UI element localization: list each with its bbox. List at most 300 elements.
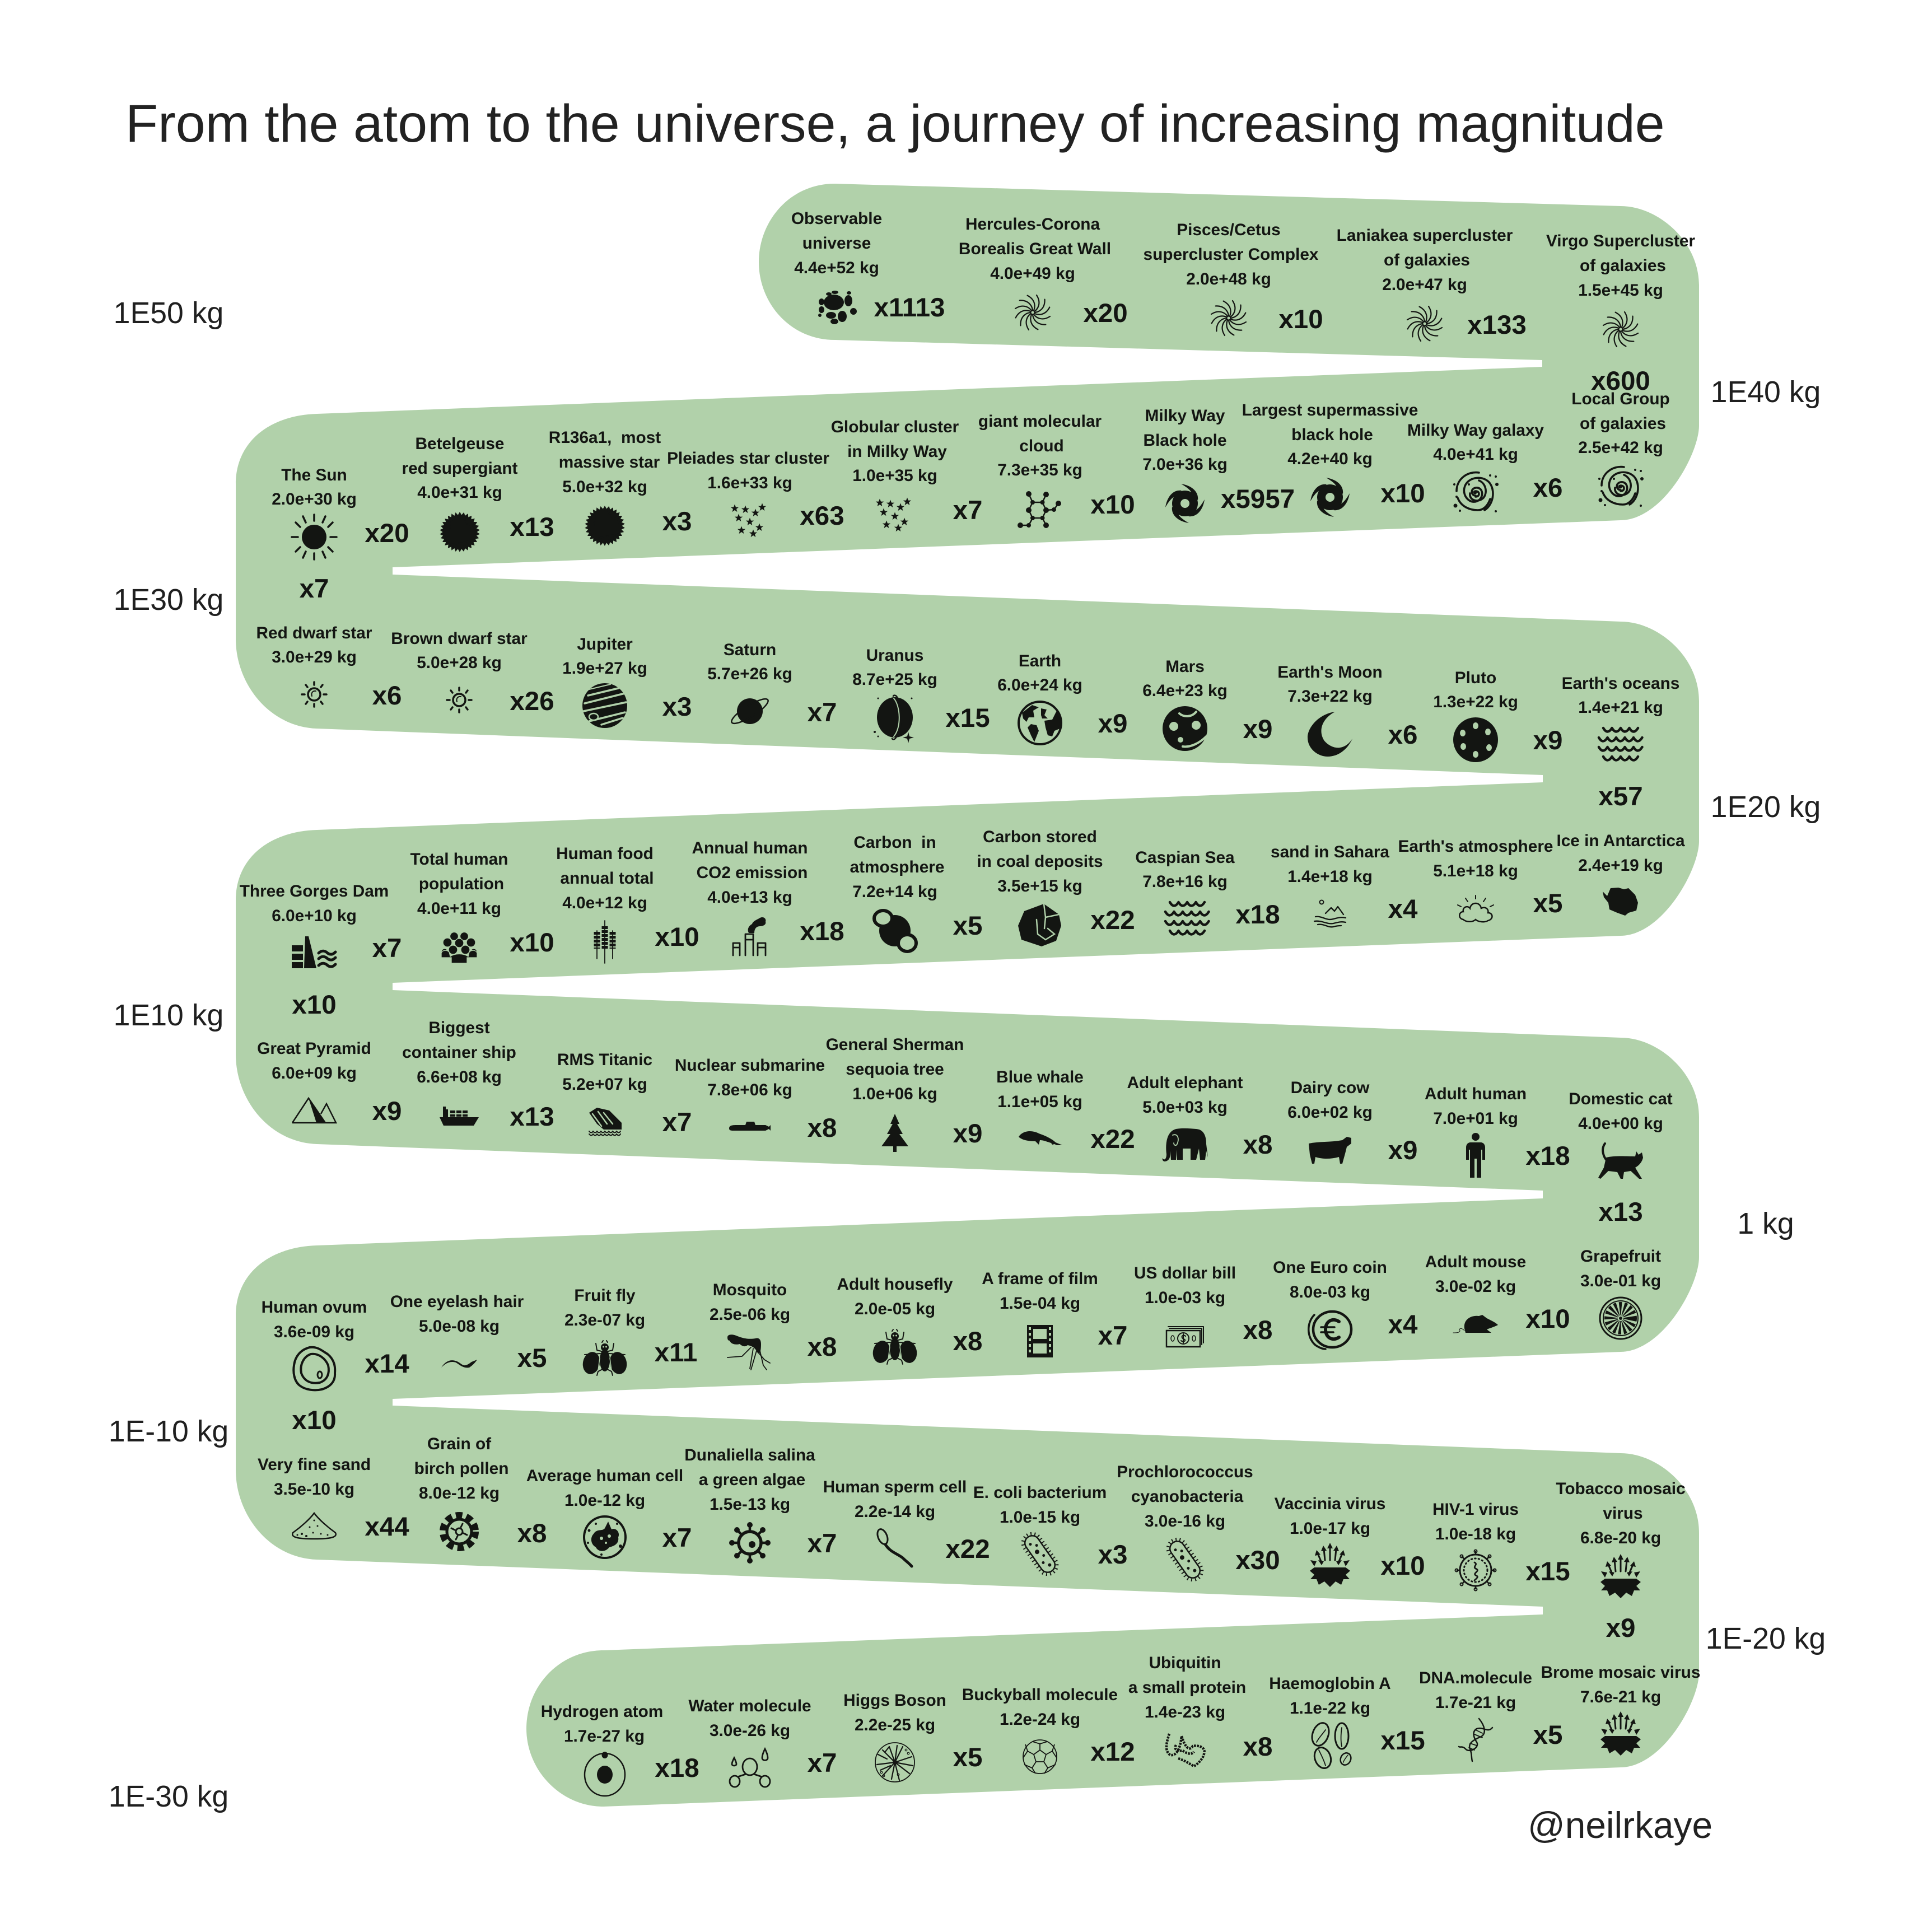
item: Hydrogen atom: 1.7e-27 kg [564,1727,645,1746]
item: Adult housefly: Adult housefly [837,1275,953,1294]
item: Adult human: 7.0e+01 kg [1433,1109,1518,1128]
item: Betelgeuse red supergiant [402,435,518,555]
item: HIV-1 virus: HIV-1 virus [1432,1500,1519,1519]
multiplier: x57 [1598,782,1643,811]
axis label 1E20: 1E20 kg [1711,790,1821,824]
item: Pleiades star cluster: 1.6e+33 kg [707,474,792,492]
item: Observable universe: 4.4e+52 kg [794,259,879,277]
item: Largest supermassive black hole: black hole [1291,426,1373,444]
item: US dollar bill [1134,1264,1236,1347]
item: DNA.molecule: DNA.molecule [1419,1669,1532,1687]
axis label 1E30: 1E30 kg [114,583,223,617]
item: Pluto: Pluto [1455,669,1496,687]
item: Human ovum [262,1298,367,1390]
item: Water molecule: 3.0e-26 kg [710,1721,790,1740]
item: Adult human: Adult human [1425,1085,1527,1103]
item: Blue whale: 1.1e+05 kg [997,1093,1082,1111]
item: Human sperm cell [823,1478,967,1566]
multiplier: x3 [1098,1540,1127,1570]
item: General Sherman sequoia tree [826,1035,964,1152]
item: Very fine sand: 3.5e-10 kg [274,1480,354,1499]
item: Local Group of galaxies: Local Group [1571,390,1670,408]
axis label 1E-30: 1E-30 kg [109,1780,228,1813]
multiplier: x8 [808,1332,837,1362]
item: Grain of birch pollen: 8.0e-12 kg [419,1484,500,1502]
item: Globular cluster in Milky Way [831,418,959,531]
item: Total human population [410,850,508,963]
multiplier: x15 [945,703,990,733]
multiplier: x13 [1598,1197,1643,1227]
item: Great Pyramid [257,1039,371,1123]
item: sand in Sahara [1271,843,1389,927]
item: Total human population: 4.0e+11 kg [417,899,501,918]
axis label 1E50: 1E50 kg [114,296,223,330]
item: Saturn: Saturn [724,641,776,659]
item: Vaccinia virus: 1.0e-17 kg [1290,1519,1370,1538]
item: Dunaliella salina a green algae: a green algae [699,1471,805,1489]
multiplier: x30 [1235,1546,1280,1575]
item: Carbon in atmosphere: 7.2e+14 kg [852,883,937,901]
item: Fruit fly: Fruit fly [574,1286,636,1305]
multiplier: x22 [945,1534,990,1564]
item: E. coli bacterium: 1.0e-15 kg [1000,1508,1080,1527]
multiplier: x8 [953,1327,982,1356]
ribbon: serpentine green band [236,184,1699,1807]
item: Brown dwarf star [391,629,528,712]
item: Human sperm cell: Human sperm cell [823,1478,967,1496]
item: E. coli bacterium [973,1483,1107,1578]
item: Average human cell: 1.0e-12 kg [564,1491,645,1510]
item: Hercules-Corona Borealis Great Wall: Borealis Great Wall [959,240,1111,258]
item: Annual human CO2 emission: Annual human [692,839,808,857]
multiplier: x3 [662,692,692,722]
item: Globular cluster in Milky Way: Globular cluster [831,418,959,436]
item: Hercules-Corona Borealis Great Wall: Hercules-Corona [965,215,1100,234]
multiplier: x9 [1606,1613,1635,1643]
item: Great Pyramid: 6.0e+09 kg [272,1064,357,1082]
item: Prochlorococcus cyanobacteria [1117,1463,1253,1583]
item: Mosquito [710,1281,790,1370]
multiplier: x10 [1278,305,1323,334]
item: Virgo Supercluster of galaxies: of galaxies [1580,256,1666,275]
item: General Sherman sequoia tree: 1.0e+06 kg [852,1085,937,1103]
item: DNA.molecule: 1.7e-21 kg [1435,1693,1516,1712]
item: Earth: Earth [1019,652,1061,670]
item: R136a1, most massive star [549,428,661,549]
item: Domestic cat [1569,1090,1673,1179]
multiplier: x44 [365,1512,409,1542]
item: One eyelash hair [390,1292,524,1368]
multiplier: x7 [300,574,329,604]
item: Brown dwarf star: 5.0e+28 kg [417,654,502,672]
item: One eyelash hair: 5.0e-08 kg [419,1317,500,1336]
item: Human food annual total: 4.0e+12 kg [562,894,647,912]
item: Adult housefly: 2.0e-05 kg [855,1300,935,1318]
item: Tobacco mosaic virus [1556,1480,1686,1598]
item: Total human population: Total human [410,850,508,869]
item: Human ovum: Human ovum [262,1298,367,1317]
item: Saturn: 5.7e+26 kg [707,665,792,683]
item: One eyelash hair: One eyelash hair [390,1292,524,1311]
item: Brome mosaic virus [1541,1663,1700,1756]
item: One Euro coin: One Euro coin [1273,1258,1387,1277]
item: Biggest container ship: 6.6e+08 kg [417,1068,502,1086]
item: Grain of birch pollen: Grain of [427,1435,491,1453]
item: Average human cell [526,1467,683,1558]
item: RMS Titanic: RMS Titanic [557,1051,652,1069]
item: Mosquito: 2.5e-06 kg [710,1305,790,1324]
item: Grain of birch pollen [414,1435,508,1547]
item: Annual human CO2 emission: CO2 emission [697,864,808,882]
item: Laniakea supercluster of galaxies: of galaxies [1384,251,1470,269]
item: Buckyball molecule [962,1686,1118,1774]
multiplier: x7 [1098,1321,1127,1351]
item: Grain of birch pollen: birch pollen [414,1459,508,1478]
item: Earth's oceans: 1.4e+21 kg [1578,698,1663,717]
multiplier: x600 [1591,366,1650,396]
multiplier: x15 [1380,1726,1425,1756]
item: Caspian Sea: Caspian Sea [1135,848,1235,867]
item: giant molecular cloud: 7.3e+35 kg [997,461,1082,479]
item: Local Group of galaxies: 2.5e+42 kg [1578,438,1663,457]
item: Red dwarf star [256,624,372,707]
item: Pisces/Cetus supercluster Complex: Pisces/Cetus [1177,221,1281,239]
item: Nuclear submarine: 7.8e+06 kg [707,1081,792,1099]
multiplier: x8 [1243,1732,1272,1762]
multiplier: x13 [510,1102,554,1132]
multiplier: x9 [1243,715,1272,744]
item: Adult mouse [1425,1253,1526,1333]
item: HIV-1 virus: 1.0e-18 kg [1435,1525,1516,1543]
item: Earth: 6.0e+24 kg [997,676,1082,694]
item: Laniakea supercluster of galaxies [1337,226,1513,342]
item: Caspian Sea [1135,848,1235,934]
item: Milky Way galaxy: Milky Way galaxy [1407,421,1544,440]
item: Earth's Moon: Earth's Moon [1277,663,1383,682]
item: Human food annual total [556,844,654,963]
item: Three Gorges Dam: 6.0e+10 kg [272,907,357,925]
item: The Sun: 2.0e+30 kg [272,490,357,508]
item: Grapefruit [1580,1247,1661,1339]
item: Blue whale: Blue whale [996,1068,1084,1086]
multiplier: x4 [1388,1310,1418,1340]
item: R136a1, most massive star: R136a1, most [549,428,661,447]
item: One Euro coin: 8.0e-03 kg [1290,1283,1370,1301]
item: General Sherman sequoia tree: General Sherman [826,1035,964,1054]
item: Red dwarf star: 3.0e+29 kg [272,648,357,666]
item: R136a1, most massive star: 5.0e+32 kg [562,478,647,496]
multiplier: x10 [510,928,554,958]
item: Tobacco mosaic virus: Tobacco mosaic [1556,1480,1686,1498]
item: Milky Way Black hole: Milky Way [1145,407,1225,425]
item: Domestic cat: Domestic cat [1569,1090,1673,1108]
item: Adult housefly [837,1275,953,1365]
item: Hercules-Corona Borealis Great Wall [959,215,1111,331]
item: Ubiquitin a small protein [1128,1654,1246,1766]
item: Haemoglobin A: Haemoglobin A [1269,1674,1391,1693]
multiplier: x13 [510,512,554,542]
item: Adult mouse: Adult mouse [1425,1253,1526,1271]
item: Adult elephant: Adult elephant [1127,1074,1243,1092]
item: Earth's atmosphere: 5.1e+18 kg [1433,862,1518,880]
multiplier: x7 [953,496,982,525]
title: From the atom to the universe, a journey of increasing magnitude [125,94,1665,153]
item: Adult mouse: 3.0e-02 kg [1435,1277,1516,1296]
item: Virgo Supercluster of galaxies [1546,232,1695,348]
item: Domestic cat: 4.0e+00 kg [1578,1114,1663,1133]
item: Virgo Supercluster of galaxies: 1.5e+45 kg [1578,281,1663,300]
item: Earth's atmosphere [1398,837,1553,922]
multiplier: x5 [1533,889,1562,918]
item: Pleiades star cluster [667,449,829,537]
item: RMS Titanic: 5.2e+07 kg [562,1075,647,1094]
item: Laniakea supercluster of galaxies: Laniakea supercluster [1337,226,1513,245]
item: Adult elephant: 5.0e+03 kg [1142,1098,1228,1117]
item: Ubiquitin a small protein: a small protein [1128,1678,1246,1697]
item: Pisces/Cetus supercluster Complex: supercluster Complex [1144,245,1319,264]
item: Buckyball molecule: Buckyball molecule [962,1686,1118,1704]
item: Grapefruit: Grapefruit [1580,1247,1661,1266]
item: Carbon in atmosphere [850,833,944,951]
multiplier: x8 [808,1113,837,1143]
multiplier: x6 [372,681,402,711]
multiplier: x4 [1388,894,1418,924]
item: Ubiquitin a small protein: 1.4e-23 kg [1145,1703,1225,1721]
multiplier: x20 [1083,298,1128,328]
item: Earth [997,652,1082,744]
item: DNA.molecule [1419,1669,1532,1761]
item: Local Group of galaxies: of galaxies [1580,414,1666,433]
item: Jupiter [562,635,647,728]
item: Carbon stored in coal deposits: in coal deposits [977,852,1103,871]
multiplier: x3 [662,507,692,536]
axis label 1 kg: 1 kg [1737,1207,1794,1240]
item: Globular cluster in Milky Way: in Milky Way [847,442,947,461]
item: Vaccinia virus [1275,1495,1385,1587]
multiplier: x5 [953,911,982,941]
row 8 [541,1654,1700,1796]
item: Adult human [1425,1085,1527,1178]
item: Virgo Supercluster of galaxies: Virgo Supercluster [1546,232,1695,250]
item: A frame of film: 1.5e-04 kg [1000,1294,1080,1313]
item: Buckyball molecule: 1.2e-24 kg [1000,1710,1080,1729]
item: Betelgeuse red supergiant: 4.0e+31 kg [417,483,502,502]
item: Pluto [1433,669,1518,762]
item: Adult elephant [1127,1074,1243,1161]
item: Pleiades star cluster: Pleiades star cluster [667,449,829,468]
item: Observable universe: universe [802,234,871,253]
item: Fruit fly [564,1286,645,1376]
item: US dollar bill: US dollar bill [1134,1264,1236,1282]
item: Pluto: 1.3e+22 kg [1433,693,1518,711]
multiplier: x133 [1467,310,1527,340]
item: A frame of film [982,1270,1098,1357]
multiplier: x18 [1235,900,1280,930]
multiplier: x8 [1243,1130,1272,1160]
item: Pisces/Cetus supercluster Complex [1144,221,1319,337]
multiplier: x8 [517,1519,547,1548]
multiplier: x18 [655,1753,699,1783]
multiplier: x9 [1388,1136,1417,1165]
multiplier: x10 [1380,1551,1425,1581]
multiplier: x9 [953,1119,982,1149]
multiplier: x26 [510,687,554,716]
item: Largest supermassive black hole: 4.2e+40 kg [1287,450,1373,468]
item: Tobacco mosaic virus: 6.8e-20 kg [1580,1529,1661,1547]
item: Earth's oceans [1562,674,1679,760]
multiplier: x5 [953,1743,982,1772]
multiplier: x18 [800,917,844,946]
multiplier: x5 [1533,1720,1562,1750]
item: HIV-1 virus [1432,1500,1519,1590]
item: Betelgeuse red supergiant: red supergiant [402,459,518,478]
multiplier: x12 [1090,1737,1135,1767]
item: Earth's atmosphere: Earth's atmosphere [1398,837,1553,856]
item: Uranus: Uranus [866,646,923,665]
item: Dairy cow [1287,1079,1373,1164]
item: Saturn [707,641,792,727]
item: Uranus [852,646,937,743]
item: Dairy cow: 6.0e+02 kg [1287,1103,1373,1122]
row 4 [240,828,1685,1020]
multiplier: x10 [1525,1304,1570,1334]
multiplier: x5 [517,1343,547,1373]
multiplier: x22 [1090,906,1135,935]
multiplier: x9 [1533,726,1562,755]
item: Haemoglobin A [1269,1674,1391,1771]
axis label 1E-10: 1E-10 kg [109,1415,228,1448]
multiplier: x6 [1388,720,1417,750]
item: US dollar bill: 1.0e-03 kg [1145,1289,1225,1307]
item: A frame of film: A frame of film [982,1270,1098,1288]
item: Human food annual total: Human food [556,844,654,863]
item: Mars [1142,657,1228,751]
row 6 [262,1247,1661,1435]
item: Milky Way Black hole: 7.0e+36 kg [1142,455,1228,474]
multiplier: x7 [808,1529,837,1558]
item: Blue whale [996,1068,1084,1145]
item: Earth's Moon [1277,663,1383,757]
item: Higgs Boson: Higgs Boson [843,1691,946,1710]
item: Ice in Antarctica [1556,832,1685,916]
item: R136a1, most massive star: massive star [559,453,660,472]
row 5 [257,1019,1673,1227]
item: Globular cluster in Milky Way: 1.0e+35 kg [852,466,937,485]
multiplier: x9 [372,1096,402,1126]
item: Human ovum: 3.6e-09 kg [274,1323,354,1341]
multiplier: x18 [1525,1141,1570,1171]
item: Human food annual total: annual total [560,869,654,888]
item: Earth's oceans: Earth's oceans [1562,674,1679,693]
multiplier: x1113 [874,293,945,323]
item: Observable universe [791,209,882,324]
item: Brome mosaic virus: Brome mosaic virus [1541,1663,1700,1682]
item: Hydrogen atom: Hydrogen atom [541,1702,663,1721]
multiplier: x7 [662,1523,692,1553]
item: Nuclear submarine: Nuclear submarine [675,1056,825,1075]
item: Observable universe: Observable [791,209,882,228]
item: Uranus: 8.7e+25 kg [852,670,937,689]
multiplier: x7 [808,698,837,727]
row 1 [791,209,1695,396]
item: Carbon in atmosphere: Carbon in [853,833,936,852]
multiplier: x8 [1243,1315,1272,1345]
multiplier: x20 [365,519,409,548]
item: Biggest container ship [402,1019,516,1126]
item: Local Group of galaxies [1571,390,1670,507]
item: The Sun [272,466,357,559]
item: Higgs Boson [843,1691,946,1782]
multiplier: x7 [372,934,402,963]
item: sand in Sahara: sand in Sahara [1271,843,1389,861]
item: Dunaliella salina a green algae: 1.5e-13 kg [710,1495,790,1514]
item: Prochlorococcus cyanobacteria: 3.0e-16 kg [1145,1512,1225,1530]
item: Carbon stored in coal deposits: Carbon stored [983,828,1097,846]
row 7 [258,1435,1686,1643]
item: Prochlorococcus cyanobacteria: cyanobacteria [1131,1487,1244,1506]
axis label 1E10: 1E10 kg [114,998,223,1032]
item: Milky Way galaxy: 4.0e+41 kg [1433,445,1518,464]
item: Dairy cow: Dairy cow [1291,1079,1370,1097]
item: Biggest container ship: Biggest [428,1019,490,1037]
item: Brome mosaic virus: 7.6e-21 kg [1580,1688,1661,1706]
item: Dunaliella salina a green algae: Dunaliella salina [684,1446,815,1464]
item: Hercules-Corona Borealis Great Wall: 4.0e+49 kg [990,264,1075,283]
multiplier: x7 [662,1108,692,1137]
credit: @neilrkaye [1528,1804,1712,1846]
item: giant molecular cloud: cloud [1019,437,1064,455]
axis labels [109,296,1826,1813]
item: Annual human CO2 emission [692,839,808,955]
item: Ubiquitin a small protein: Ubiquitin [1149,1654,1221,1672]
multiplier: x10 [1090,490,1135,520]
item: Tobacco mosaic virus: virus [1603,1504,1643,1523]
item: Prochlorococcus cyanobacteria: Prochlorococcus [1117,1463,1253,1481]
item: Betelgeuse red supergiant: Betelgeuse [416,435,504,453]
item: Great Pyramid: Great Pyramid [257,1039,371,1058]
item: Milky Way galaxy [1407,421,1544,512]
item: E. coli bacterium: E. coli bacterium [973,1483,1107,1502]
multiplier: x14 [365,1349,409,1379]
item: Fruit fly: 2.3e-07 kg [564,1311,645,1329]
item: Mosquito: Mosquito [713,1281,787,1299]
item: Haemoglobin A: 1.1e-22 kg [1290,1699,1370,1718]
item: Largest supermassive black hole [1242,401,1418,517]
item: Laniakea supercluster of galaxies: 2.0e+47 kg [1382,276,1467,294]
item: Very fine sand: Very fine sand [258,1455,371,1474]
multiplier: x10 [292,1406,337,1435]
item: Carbon stored in coal deposits [977,828,1103,946]
item: Largest supermassive black hole: Largest supermassive [1242,401,1418,419]
item: Higgs Boson: 2.2e-25 kg [855,1716,935,1734]
item: General Sherman sequoia tree: sequoia tree [846,1060,944,1079]
item: Carbon stored in coal deposits: 3.5e+15 kg [997,877,1082,895]
item: Three Gorges Dam [240,882,389,968]
item: The Sun: The Sun [281,466,347,484]
row 3 [256,624,1679,811]
item: Pisces/Cetus supercluster Complex: 2.0e+48 kg [1186,270,1271,288]
item: Average human cell: Average human cell [526,1467,683,1485]
item: Jupiter: Jupiter [577,635,633,654]
item: Human sperm cell: 2.2e-14 kg [855,1502,935,1521]
item: sand in Sahara: 1.4e+18 kg [1287,867,1373,886]
item: Milky Way Black hole: Black hole [1143,431,1227,450]
item: Water molecule: Water molecule [688,1697,811,1715]
item: Hydrogen atom [541,1702,663,1796]
item: Caspian Sea: 7.8e+16 kg [1142,872,1228,891]
item: Mars: Mars [1165,657,1205,676]
item: Ice in Antarctica: 2.4e+19 kg [1578,856,1663,875]
